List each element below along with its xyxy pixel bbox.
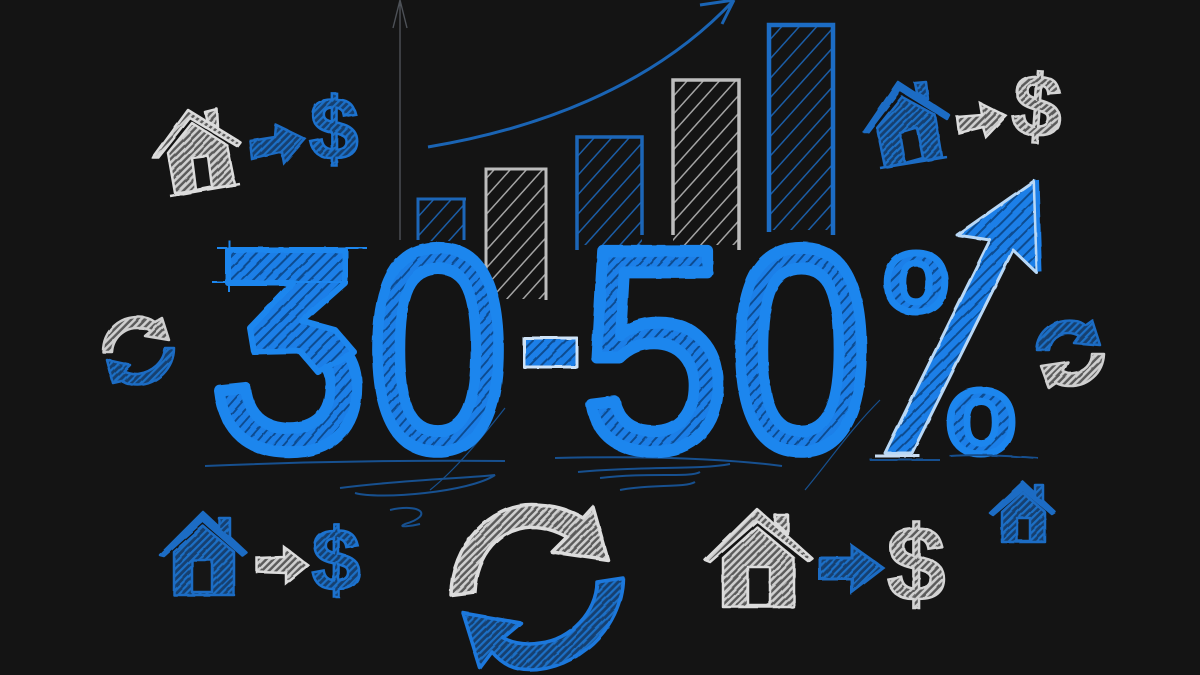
percent: lower ring: o <box>946 348 1016 478</box>
dollar: $ <box>310 79 358 178</box>
arrow <box>957 103 1006 137</box>
axis arrow <box>393 0 407 240</box>
dollar: $ <box>1009 54 1065 157</box>
dollar: $ <box>887 505 945 623</box>
underline sketch strokes <box>205 400 880 526</box>
arrow <box>257 547 308 583</box>
digit 0: 0 <box>731 189 871 511</box>
arrow <box>820 546 883 592</box>
house <box>705 509 812 607</box>
dollar: $ <box>312 510 360 609</box>
dash <box>524 338 577 367</box>
icon: large cycle arrows, bottom centre <box>451 505 623 670</box>
icon: small house, right <box>990 482 1055 542</box>
icon: cycle arrows, right <box>1037 320 1104 388</box>
bar 2 <box>485 169 546 300</box>
digit 3: 3 <box>208 151 370 519</box>
chart: rising bars with trend line <box>393 0 833 300</box>
arrow <box>250 125 305 163</box>
blue arc <box>463 578 623 670</box>
icon group: house to dollar, bottom left <box>160 510 360 609</box>
house <box>864 82 949 168</box>
big rising arrow <box>870 180 1040 460</box>
percent: upper ring: o <box>883 213 949 334</box>
icon group: house to dollar, bottom right <box>705 505 945 623</box>
digit 5: 5 <box>581 188 729 510</box>
bar 4 <box>673 80 739 250</box>
bar 5 <box>768 25 833 235</box>
bar 3 <box>576 137 642 250</box>
icon group: house to dollar, top right <box>864 54 1065 168</box>
digit 0: 0 <box>368 189 508 511</box>
headline: 30-50% <box>212 240 1016 458</box>
house <box>160 512 247 595</box>
trend curve <box>428 0 734 147</box>
house <box>153 109 240 196</box>
digit 3 <box>212 240 367 458</box>
white arc <box>451 505 608 595</box>
icon group: house to dollar, top left <box>153 79 358 196</box>
bar 1 <box>417 199 466 241</box>
icon: cycle arrows, left <box>103 317 174 385</box>
